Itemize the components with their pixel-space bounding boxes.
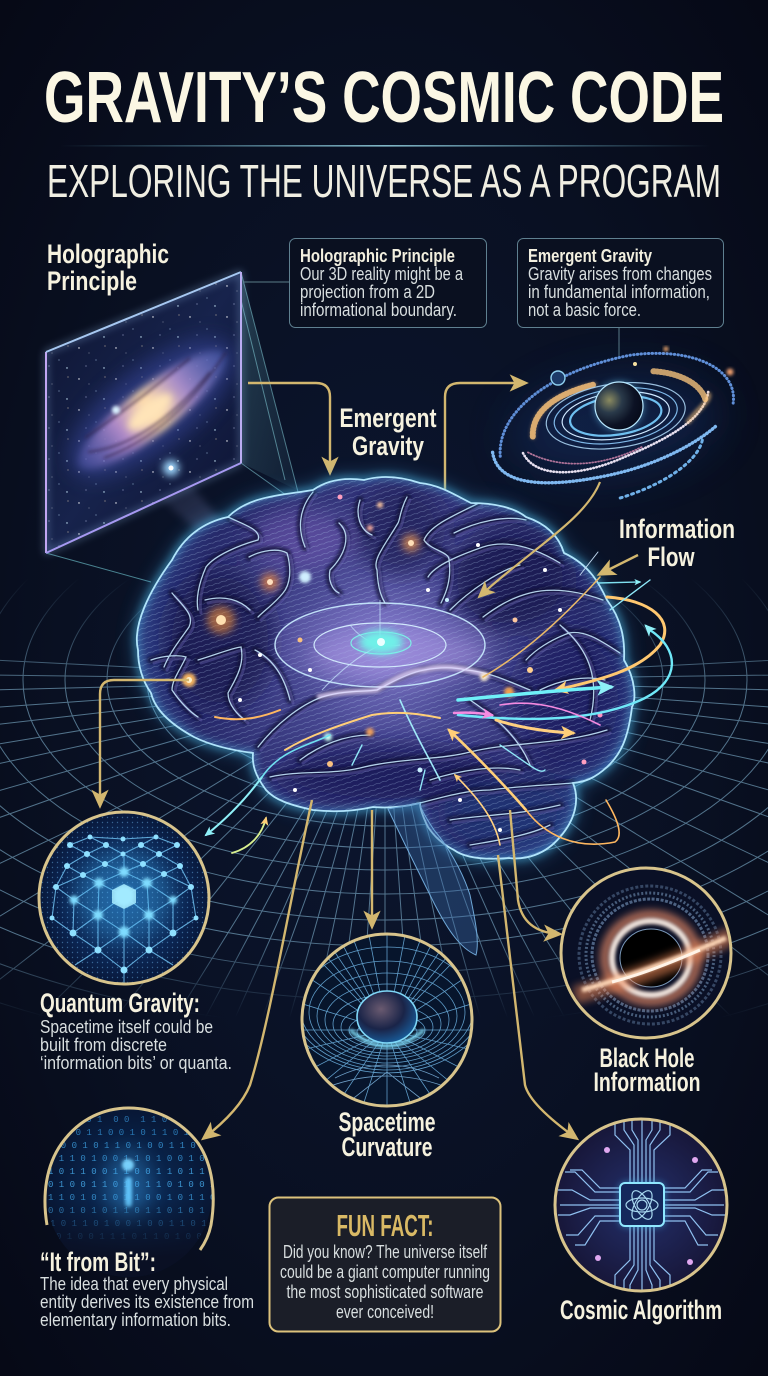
label: spacetime curvature: Curvature (342, 1132, 432, 1162)
heading and text: quantum gravity: built from discrete (40, 1034, 167, 1055)
heading and text: it from bit: “It from Bit”: (40, 1247, 156, 1277)
fine mesh (130, 470, 640, 870)
holographic projection beams (46, 272, 300, 582)
label: black hole information: Black Hole (600, 1043, 694, 1073)
circle: it from bit: 0 1 0 0 1 1 0 1 0 1 1 0 1 0 0 1 (48, 1180, 215, 1190)
label: emergent gravity: Gravity (352, 431, 424, 461)
outline (137, 477, 634, 859)
heading and text: it from bit: elementary information bits. (40, 1309, 231, 1330)
label: holographic principle (47, 239, 169, 296)
callout: emergent gravity: in fundamental information, (528, 281, 710, 302)
label: information flow (619, 514, 735, 572)
callout: emergent gravity: Gravity arises from changes (528, 263, 712, 284)
neural sparks (182, 494, 602, 832)
heading and text: quantum gravity: Spacetime itself could be (40, 1016, 213, 1037)
label: emergent gravity (340, 403, 436, 461)
gold arrow: to spacetime curvature (371, 810, 373, 926)
gold arrow: panel to brain (248, 383, 330, 472)
gyri folds (151, 492, 623, 848)
circle: it from bit: 1 0 1 1 0 1 0 0 1 0 0 1 1 0 1 (50, 1219, 207, 1229)
circle: cosmic algorithm chip (555, 1118, 727, 1295)
heading and text: it from bit: The idea that every physical (40, 1273, 228, 1294)
spacetime grid floor (0, 587, 768, 1012)
label: information flow: Flow (648, 542, 695, 572)
circle: it from bit: 0 1 0 0 1 1 1 0 1 1 0 1 0 0 (56, 1232, 202, 1242)
circle: it from bit (45, 1108, 215, 1283)
label: black hole information: Information (594, 1067, 700, 1097)
circle: it from bit: 1 0 0 1 0 1 1 0 1 0 0 1 1 0 1 (50, 1141, 207, 1151)
callout: fun fact: could be a giant computer running (280, 1261, 490, 1282)
colour patches (165, 485, 625, 847)
callout: holographic principle: projection from a 2D (300, 281, 435, 302)
circle: it from bit: 0 1 1 0 1 0 0 1 1 0 1 0 0 1 0 1 (48, 1154, 215, 1164)
gold arrow: to cosmic algorithm (498, 855, 576, 1138)
callout: emergent gravity: Emergent Gravity (528, 245, 653, 266)
brain (130, 470, 640, 870)
brain body (137, 477, 634, 859)
temporal highlight (317, 667, 490, 697)
callout: fun fact: FUN FACT: (336, 1208, 434, 1243)
callout: fun fact: Did you know? The universe itself (283, 1241, 488, 1262)
outer glow (137, 477, 634, 859)
gold arrow: information flow label to brain (600, 555, 638, 574)
circle: it from bit: 1 1 0 1 0 1 0 1 1 0 0 1 0 1 1 0 (48, 1193, 215, 1203)
galaxy orbit with planet (482, 342, 745, 515)
circle: it from bit: 1 0 1 1 0 0 1 1 0 0 1 1 0 1 1 0 (48, 1167, 215, 1177)
heading and text: it from bit (40, 1247, 254, 1330)
circle: it from bit: 0 1 0 1 1 0 0 1 0 1 1 0 1 0 (54, 1128, 200, 1138)
circle: quantum gravity lattice (35, 810, 215, 990)
callout: holographic principle: Holographic Principle (300, 245, 455, 266)
circle: spacetime curvature (300, 932, 474, 1108)
gold arrow: to quantum gravity (100, 680, 189, 805)
heading and text: quantum gravity: Quantum Gravity: (40, 988, 200, 1018)
callout: fun fact: the most sophisticated software (286, 1281, 484, 1302)
label: spacetime curvature: Spacetime (338, 1107, 436, 1137)
gold arrow: to it from bit (204, 800, 312, 1138)
circle: it from bit: 0 0 1 0 1 0 1 1 0 1 1 0 1 0 1 1 (48, 1206, 215, 1216)
holographic panel: galaxy (40, 270, 255, 560)
brain stem (388, 803, 477, 955)
callout: holographic principle (290, 238, 486, 328)
circle: it from bit: 1 0 1 0 0 1 1 0 1 (70, 1115, 183, 1125)
callout: holographic principle: Our 3D reality might be a (300, 263, 464, 284)
gold arrow: to black hole (510, 810, 559, 934)
callout: emergent gravity: not a basic force. (528, 299, 641, 320)
heading and text: quantum gravity: ‘information bits’ or quanta. (40, 1052, 232, 1073)
gold arrow: galaxy down into brain (480, 482, 600, 596)
label: holographic principle: Principle (47, 266, 137, 296)
limbic rings (275, 600, 485, 690)
callout: emergent gravity (518, 238, 724, 328)
heading and text: quantum gravity (40, 988, 232, 1073)
callout: holographic principle: informational boundary. (300, 299, 457, 320)
label: spacetime curvature (338, 1107, 436, 1162)
label: information flow: Information (619, 514, 735, 544)
gold arrow: brain to galaxy (445, 383, 525, 530)
callout: fun fact: ever conceived! (336, 1301, 434, 1322)
label: emergent gravity: Emergent (340, 403, 436, 433)
connector lines to callouts (243, 282, 619, 358)
callout: fun fact (270, 1198, 500, 1332)
information flow arrows (206, 552, 672, 853)
label: holographic principle: Holographic (47, 239, 169, 269)
label: black hole information (594, 1043, 700, 1097)
circle: black hole (561, 868, 732, 1038)
heading and text: it from bit: entity derives its existence from (40, 1291, 254, 1312)
